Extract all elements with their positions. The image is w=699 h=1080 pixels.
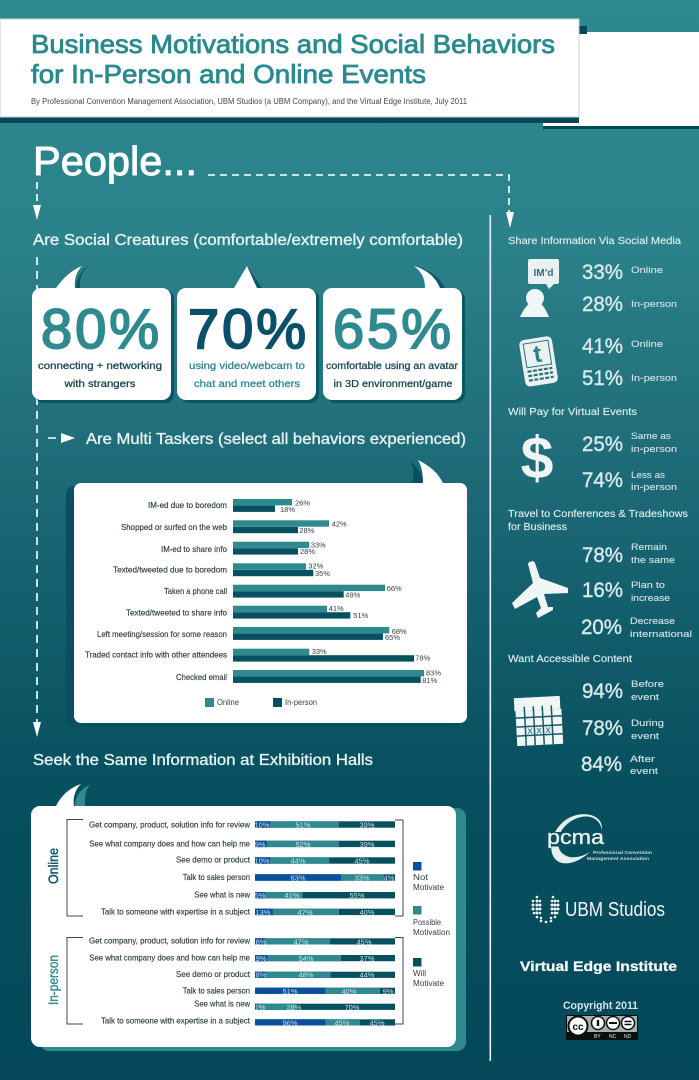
segment values: 10%	[254, 820, 270, 830]
segment values: 4%	[384, 874, 395, 882]
arrow: branch to multi taskers	[48, 433, 75, 443]
icon: calendar	[514, 696, 563, 746]
bar values: 51%	[353, 611, 369, 620]
heading: Travel to Conferences & Tradeshows	[508, 508, 688, 520]
logo: pcma	[545, 814, 652, 863]
bar values: 78%	[415, 654, 431, 662]
byline: By Professional Convention Management Association, UBM Studios (a UBM Company), and the Virtual Edge Institute, July 2011	[31, 97, 468, 106]
panel: travel	[508, 508, 692, 640]
bar values: 83%	[426, 668, 441, 678]
legend: In-person	[285, 698, 317, 707]
segment values: 54%	[298, 954, 314, 963]
row labels: See what company does and how can help me	[89, 839, 250, 848]
title	[31, 29, 555, 89]
row labels: See what is new	[194, 890, 250, 899]
bar values: 18%	[280, 505, 295, 514]
stats: After	[630, 754, 655, 765]
panel: 80 percent	[32, 265, 174, 403]
segment values: 47%	[297, 908, 313, 917]
stats: Online	[631, 339, 663, 350]
stats: increase	[631, 593, 670, 604]
title: for In-Person and Online Events	[31, 59, 426, 89]
chart labels: Traded contact info with other attendees	[85, 650, 227, 660]
stats: in-person	[631, 482, 677, 493]
icon: creative commons badge: ND	[624, 1034, 632, 1040]
bar values: 32%	[308, 562, 324, 570]
legend	[205, 698, 317, 707]
copyright: Copyright 2011	[563, 1000, 638, 1012]
row labels: See demo or product	[176, 855, 251, 864]
icon: IM person: IM’d	[534, 268, 554, 279]
segment values: 9%	[383, 987, 394, 996]
icon: calendar: X	[536, 726, 543, 736]
segment values: 44%	[359, 971, 375, 980]
heading: People: People...	[33, 138, 197, 184]
bar values: 35%	[315, 569, 330, 578]
stats: in-person	[631, 444, 677, 455]
arrow: dashed path to right column	[208, 175, 514, 228]
row labels: See what is new	[194, 1000, 250, 1009]
stats: 94%	[582, 680, 623, 703]
icon: calendar: X	[527, 727, 534, 736]
stats: Remain	[631, 542, 667, 553]
chart labels: Left meeting/session for some reason	[97, 630, 227, 639]
segment values: 63%	[290, 874, 306, 882]
brackets	[67, 820, 403, 1024]
segment values: 96%	[282, 1018, 298, 1028]
stats: 78%	[582, 544, 623, 567]
panel: 65 percent	[323, 266, 465, 403]
panel: exhibition halls chart	[31, 784, 466, 1051]
stats: 74%	[582, 469, 623, 492]
segment values: 48%	[298, 971, 314, 980]
header panel	[0, 19, 699, 129]
legend: will motivate	[413, 958, 445, 988]
bar values: 26%	[295, 498, 310, 508]
segment values: 40%	[341, 987, 357, 996]
segment values: 45%	[334, 1018, 350, 1028]
legend: possible motivation: Possible	[413, 918, 441, 927]
heading: Share Information Via Social Media	[508, 235, 681, 247]
segment values: 55%	[349, 891, 365, 900]
heading: multi taskers: Are Multi Taskers (select all behaviors experienced)	[86, 431, 466, 448]
heading: social creatures: Are Social Creatures (comfortable/extremely comfortable)	[33, 232, 463, 249]
legend: will motivate: Will	[413, 969, 426, 978]
segment values: 10%	[254, 856, 270, 866]
segment values: 5%	[255, 891, 266, 900]
column divider	[490, 215, 491, 1061]
segment values: 37%	[359, 954, 375, 963]
chart labels: Taken a phone call	[164, 587, 227, 596]
icon: creative commons badge: NC	[609, 1034, 617, 1040]
stats: During	[631, 718, 664, 729]
row labels: See demo or product	[176, 970, 251, 979]
panel: multi tasking bar chart	[66, 460, 467, 727]
segment values: 1%	[255, 1003, 266, 1012]
bar values: 65%	[385, 633, 400, 642]
bar values: 33%	[311, 540, 326, 550]
logo: pcma: Professional Convention	[593, 850, 652, 855]
stats	[581, 679, 664, 777]
caption: comfortable using an avatar	[326, 360, 459, 372]
stats: 33%	[582, 261, 623, 284]
stats: Online	[631, 265, 663, 276]
chart labels: IM-ed to share info	[161, 545, 227, 554]
icon: creative commons badge: cc	[572, 1022, 584, 1033]
stats: 51%	[582, 367, 623, 390]
stats: Same as	[631, 431, 671, 442]
segment values: 51%	[282, 987, 298, 996]
stat: 80%: 80%	[41, 297, 159, 360]
bar values: 41%	[329, 604, 344, 613]
segment values: 45%	[369, 1018, 385, 1028]
stats: Less as	[631, 470, 665, 481]
segment values: 41%	[284, 891, 300, 900]
caption: chat and meet others	[194, 378, 300, 390]
segment values: 45%	[356, 938, 372, 946]
segment values: 8%	[256, 938, 267, 946]
chart labels: Checked email	[176, 673, 227, 682]
segment values: 9%	[256, 954, 267, 963]
stats: the same	[631, 555, 675, 566]
caption: using video/webcam to	[189, 360, 305, 372]
caption	[326, 360, 459, 390]
bar values: 28%	[299, 526, 315, 535]
stats	[582, 431, 677, 493]
row labels: Talk to someone with expertise in a subject	[101, 1016, 251, 1025]
row labels: See what company does and how can help me	[89, 954, 250, 963]
panel: 70 percent	[177, 266, 319, 403]
in-person bars	[233, 506, 421, 683]
row labels: Get company, product, solution info for review	[89, 820, 250, 829]
stats: international	[630, 629, 692, 640]
chart labels: Texted/tweeted to share info	[126, 608, 227, 618]
icon: creative commons badge	[566, 1015, 638, 1040]
segment values: 40%	[359, 908, 375, 917]
heading: for Business	[508, 521, 567, 533]
caption	[38, 360, 162, 390]
stats: 20%	[581, 616, 622, 639]
legend: possible motivation	[413, 906, 450, 937]
caption: connecting + networking	[38, 360, 162, 372]
stats: event	[631, 731, 659, 742]
row labels: Get company, product, solution info for review	[89, 937, 250, 946]
segment values: 44%	[290, 856, 306, 866]
stats	[582, 261, 677, 316]
chart labels: Shopped or surfed on the web	[121, 523, 227, 532]
stats: In-person	[631, 299, 677, 310]
row labels: Talk to sales person	[183, 873, 250, 882]
stats: event	[631, 692, 659, 703]
segment values: 52%	[295, 840, 311, 849]
caption: in 3D environment/game	[334, 378, 453, 390]
row labels: Talk to sales person	[183, 987, 250, 996]
segment values: 51%	[295, 820, 311, 830]
stats: 16%	[582, 579, 623, 602]
stats: 41%	[582, 335, 623, 358]
segment values: 45%	[354, 856, 370, 866]
stats: Before	[631, 679, 664, 690]
panel: accessible content	[508, 653, 664, 777]
heading: Will Pay for Virtual Events	[508, 406, 637, 418]
logo: UBM Studios	[532, 896, 665, 923]
legend: will motivate: Motivate	[413, 979, 445, 988]
stats: In-person	[631, 373, 677, 384]
segment values: 39%	[359, 840, 375, 849]
segment values: 33%	[354, 874, 370, 882]
icon: IM person	[520, 259, 559, 317]
icon: dollar: $	[521, 425, 553, 491]
panel: will pay	[508, 406, 677, 493]
chart labels	[85, 501, 227, 682]
segment values: 13%	[255, 908, 271, 917]
bar values: 68%	[392, 627, 407, 636]
caption	[189, 360, 305, 390]
stacked bars: not motivate	[255, 821, 341, 1026]
segment values: 47%	[293, 938, 309, 946]
stats	[581, 542, 692, 640]
segment values	[254, 820, 395, 1028]
stat: 65%: 65%	[333, 297, 451, 360]
stats: event	[630, 766, 658, 777]
stats: 28%	[582, 293, 623, 316]
icon: twitter phone	[519, 336, 559, 387]
segment values: 9%	[255, 840, 266, 849]
stat: 70%: 70%	[188, 297, 306, 360]
bar values	[280, 498, 441, 685]
stats: 25%	[582, 433, 623, 456]
icon: twitter phone: t	[531, 341, 544, 368]
heading: Want Accessible Content	[508, 653, 632, 665]
bar values: 66%	[387, 584, 402, 593]
arrow: dashed path to social creatures	[33, 182, 41, 220]
heading: exhibition halls: Seek the Same Information at Exhibition Halls	[33, 752, 373, 769]
stats: 78%	[582, 717, 623, 740]
bar values: 33%	[312, 647, 327, 656]
stacked bars: possible motivation	[255, 821, 384, 1026]
icon: creative commons badge: BY	[594, 1034, 601, 1040]
logo: Virtual Edge Institute: Virtual Edge Institute	[520, 958, 677, 974]
stats: Decrease	[630, 616, 675, 627]
bar values: 42%	[332, 520, 347, 528]
group label: online: Online	[45, 848, 61, 884]
icon: calendar: X	[545, 726, 552, 735]
online bars	[233, 499, 424, 676]
stats	[582, 335, 677, 390]
segment values: 8%	[256, 971, 267, 980]
stats: Plan to	[631, 580, 665, 591]
row labels	[89, 820, 251, 1025]
row labels: Talk to someone with expertise in a subject	[101, 907, 251, 916]
bar values: 48%	[345, 590, 361, 600]
chart labels: Texted/tweeted due to boredom	[113, 566, 227, 574]
legend: not motivate: Not	[413, 873, 429, 882]
arrow: dashed path down the left side	[33, 257, 41, 737]
panel: share information	[508, 235, 681, 390]
legend: Online	[217, 698, 240, 707]
bar values: 28%	[300, 547, 315, 556]
group label: in-person: In-person	[45, 955, 61, 1005]
legend: not motivate: Motivate	[413, 883, 445, 892]
stacked bars: will motivate base	[255, 821, 395, 1026]
segment values: 70%	[344, 1003, 360, 1012]
heading	[508, 508, 688, 533]
logo: pcma: Management Association	[587, 856, 649, 861]
chart labels: IM-ed due to boredom	[148, 501, 227, 510]
caption: with strangers	[63, 378, 136, 390]
stats: 84%	[581, 753, 622, 776]
legend: not motivate	[413, 862, 445, 892]
segment values: 28%	[286, 1003, 302, 1012]
icon: plane	[512, 561, 568, 618]
bar values: 81%	[422, 676, 438, 685]
logo: UBM Studios: UBM Studios	[565, 899, 665, 921]
title: Business Motivations and Social Behaviors	[31, 29, 555, 59]
segment values: 39%	[359, 820, 375, 830]
legend: possible motivation: Motivation	[413, 928, 450, 937]
logo: pcma: pcma	[547, 827, 605, 849]
